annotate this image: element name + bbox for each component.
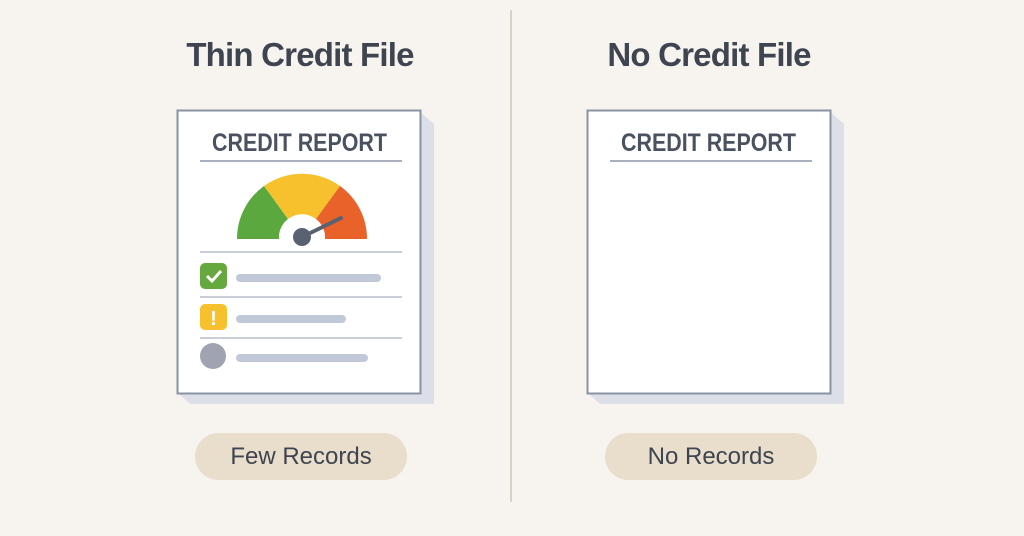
neutral item bbox=[200, 343, 368, 369]
gauge bbox=[237, 174, 367, 246]
heading: credit report: CREDIT REPORT bbox=[212, 129, 387, 157]
title: no credit file: No Credit File bbox=[607, 36, 811, 73]
document: empty credit report bbox=[588, 110, 844, 404]
pill: no records: No Records bbox=[648, 443, 774, 470]
title: thin credit file: Thin Credit File bbox=[186, 36, 414, 73]
warning item bbox=[200, 304, 346, 330]
pill: no records bbox=[605, 433, 817, 480]
check item bbox=[200, 263, 381, 289]
warning item: ! bbox=[210, 308, 217, 330]
document: empty credit report: CREDIT REPORT bbox=[621, 129, 796, 157]
pill: few records: Few Records bbox=[230, 443, 372, 470]
pill: few records bbox=[195, 433, 407, 480]
divider bbox=[510, 10, 512, 502]
